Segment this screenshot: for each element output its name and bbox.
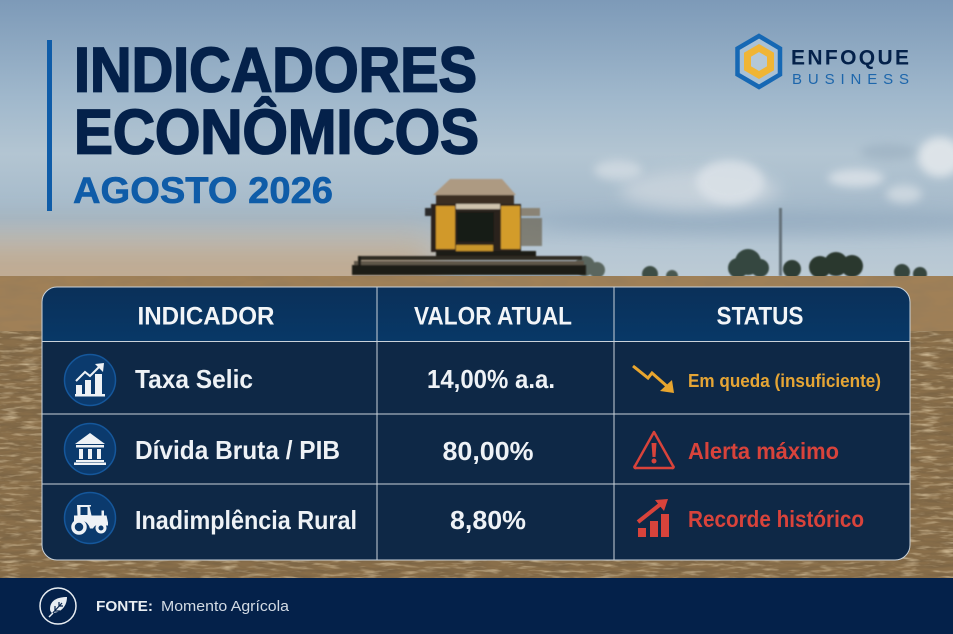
background: sky (0, 0, 953, 276)
value: Inadimplência: 8,80% (450, 505, 526, 535)
column header: valor atual: VALOR ATUAL (414, 302, 572, 330)
subtitle: AGOSTO 2026 (73, 170, 333, 211)
logo text: Enfoque: ENFOQUE (791, 46, 909, 70)
background: crop field (0, 276, 953, 578)
footer bar (0, 578, 953, 634)
icon: rising red bars (638, 499, 669, 537)
value: Selic: 14,00% a.a. (427, 364, 555, 394)
source name: Momento Agrícola (161, 598, 290, 615)
icon: alert triangle (634, 432, 674, 468)
status: alerta máximo: Alerta máximo (688, 438, 839, 464)
logo (738, 36, 909, 88)
icon: logo hexagon (738, 36, 780, 87)
row label: Dívida Bruta / PIB: Dívida Bruta / PIB (135, 435, 340, 465)
logo text: Business: BUSINESS (792, 71, 909, 88)
icon: bank building (64, 424, 116, 474)
value: Dívida: 80,00% (442, 436, 534, 466)
row label: Inadimplência Rural: Inadimplência Rural (135, 505, 357, 535)
background: distant trees and pole (575, 208, 927, 282)
source label: FONTE: (96, 599, 153, 615)
icon: leaf (40, 588, 76, 624)
status: em queda: Em queda (insuficiente) (688, 370, 881, 391)
icon: tractor (64, 492, 116, 544)
column header: status: STATUS (716, 302, 804, 330)
title accent bar (47, 40, 52, 211)
title: INDICADORES (74, 36, 477, 106)
column header: indicador: INDICADOR (138, 302, 274, 330)
row label: Taxa Selic: Taxa Selic (135, 364, 253, 394)
icon: rising bar chart (64, 354, 116, 406)
icon: falling arrow (633, 366, 674, 393)
table panel (42, 287, 910, 560)
combine harvester (352, 179, 586, 275)
title line 2: ECONÔMICOS (74, 96, 479, 168)
status: recorde histórico: Recorde histórico (688, 506, 864, 532)
